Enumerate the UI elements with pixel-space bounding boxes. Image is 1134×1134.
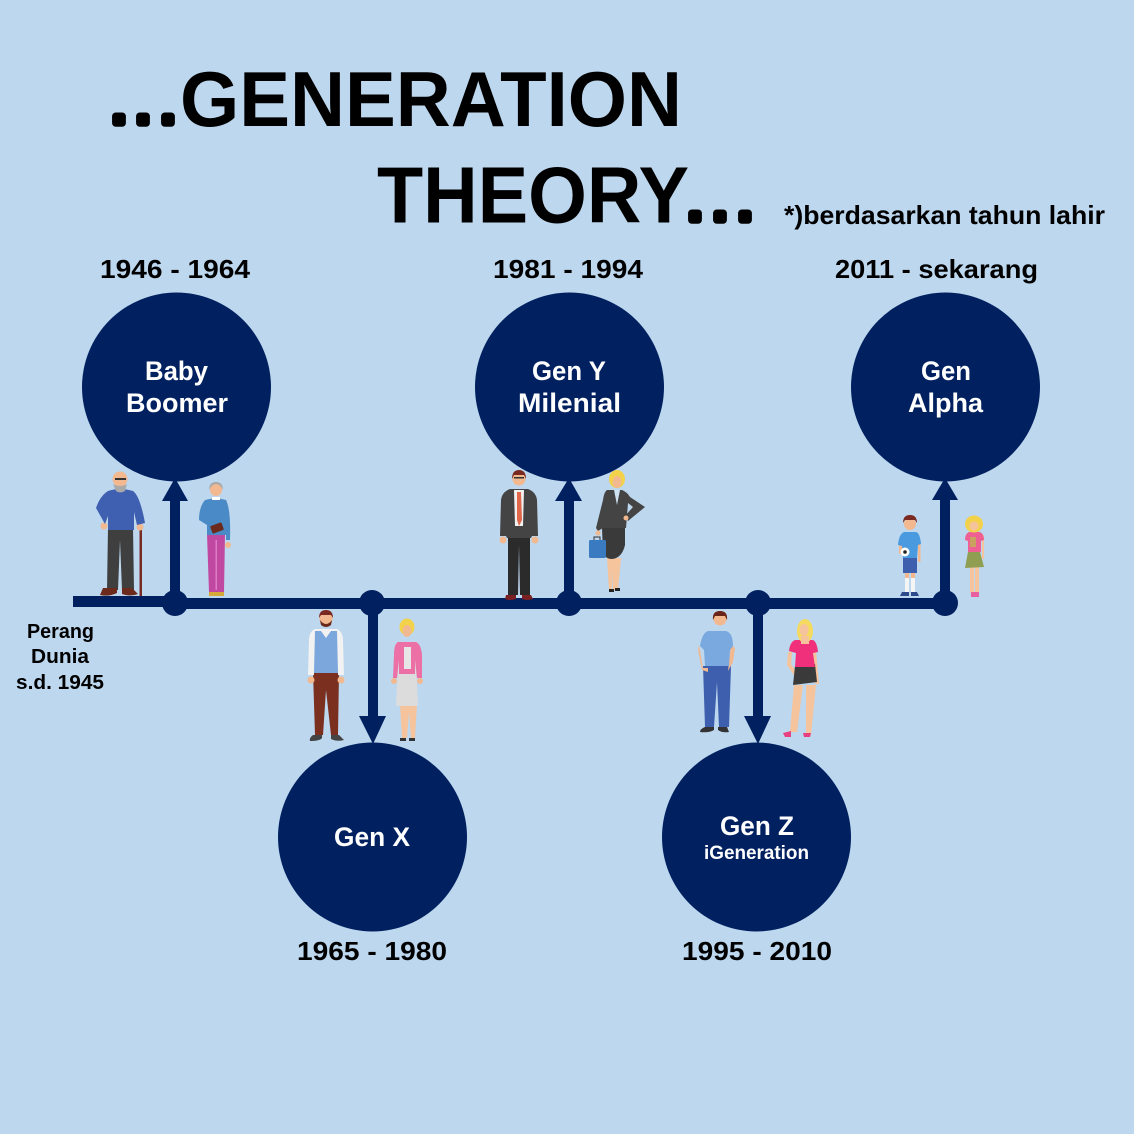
figure: elderly man with cane xyxy=(96,472,145,596)
figure: woman in pink jacket xyxy=(391,618,423,741)
circle: Gen Z: Gen Z xyxy=(720,811,794,841)
label: war era: s.d. 1945 xyxy=(16,672,104,694)
years: Gen Z: 1995 - 2010 xyxy=(682,936,832,966)
circle: Baby Boomer: Boomer xyxy=(126,388,228,418)
arrow: Gen Y xyxy=(555,478,582,600)
title: ... xyxy=(689,179,751,230)
circle: Gen Z: iGeneration xyxy=(704,843,809,864)
label: war era xyxy=(16,621,104,694)
figure: elderly woman xyxy=(199,482,231,596)
circle: Gen Alpha: Gen xyxy=(921,356,971,386)
circle: Gen Z xyxy=(662,742,851,932)
circle: Baby Boomer xyxy=(82,292,271,482)
title: GENERATION xyxy=(180,55,682,143)
circle: Baby Boomer: Baby xyxy=(145,356,208,386)
label: war era: Dunia xyxy=(31,646,90,668)
arrow: Gen Alpha xyxy=(932,478,958,600)
figure: man in suit xyxy=(500,470,538,600)
years: Gen X: 1965 - 1980 xyxy=(297,936,447,966)
arrow: Gen Z xyxy=(744,605,771,744)
circle: Gen Y xyxy=(475,292,664,482)
years: Gen Y: 1981 - 1994 xyxy=(493,254,644,284)
circle: Gen X xyxy=(278,742,467,932)
arrow: Gen X xyxy=(359,605,386,744)
circle: Gen Alpha xyxy=(851,292,1040,482)
figure: young man in t-shirt xyxy=(698,611,735,732)
circle: Gen Y: Gen Y xyxy=(532,356,606,386)
note: based on birth year: *)berdasarkan tahun lahir xyxy=(784,200,1105,230)
figure: young woman in pink top xyxy=(783,619,819,737)
title: ... xyxy=(113,82,174,133)
figure: boy with football xyxy=(898,515,921,596)
circle: Gen Y: Milenial xyxy=(518,388,621,418)
figure: man in vest xyxy=(308,610,344,741)
circle: Gen Alpha: Alpha xyxy=(908,388,984,418)
timeline axis xyxy=(73,590,958,616)
label: war era: Perang xyxy=(27,621,94,643)
years: Gen Alpha: 2011 - sekarang xyxy=(835,254,1038,284)
circle: Gen X: Gen X xyxy=(334,822,410,852)
title: THEORY xyxy=(377,150,689,240)
figure: businesswoman with briefcase xyxy=(589,470,645,592)
years: Baby Boomer: 1946 - 1964 xyxy=(100,254,251,284)
title xyxy=(113,55,751,240)
figure: girl with book xyxy=(965,516,984,597)
arrow: Baby Boomer xyxy=(162,478,188,600)
